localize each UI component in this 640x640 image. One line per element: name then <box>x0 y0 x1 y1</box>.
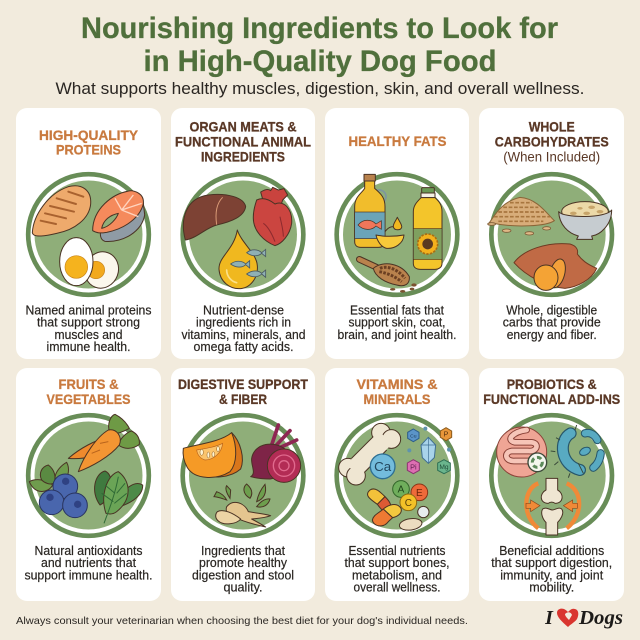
panel: whole carbohydrates <box>479 108 624 359</box>
description: that support digestion, <box>491 556 612 570</box>
description <box>491 544 612 594</box>
description: Natural antioxidants <box>34 544 142 558</box>
heading: whole carbohydrates: WHOLE <box>529 119 575 135</box>
heading: whole carbohydrates: CARBOHYDRATES <box>495 134 609 150</box>
title: Nourishing Ingredients to Look for <box>81 12 558 45</box>
description: Nutrient-dense <box>203 304 284 318</box>
description: mobility. <box>529 580 574 594</box>
heading: digestive support and fiber: DIGESTIVE SUPPORT <box>178 376 308 392</box>
logo: I love Dogs: Dogs <box>578 607 623 629</box>
description: promote healthy <box>199 556 288 570</box>
description: ingredients rich in <box>196 316 291 330</box>
icon: bone, minerals and supplements: E <box>416 488 423 499</box>
description <box>26 304 152 354</box>
heading: vitamins and minerals: VITAMINS & <box>356 376 438 392</box>
description: that support strong <box>37 316 140 330</box>
icon: bone, minerals and supplements: C <box>405 498 412 509</box>
heading: digestive support and fiber <box>178 376 308 407</box>
panel: digestive support and fiber <box>171 368 315 601</box>
description: support immune health. <box>24 568 152 582</box>
description: brain, and joint health. <box>338 328 456 342</box>
heading: organ meats: INGREDIENTS <box>201 148 285 164</box>
panel: fruits and vegetables <box>16 368 161 601</box>
description <box>182 304 306 354</box>
heading: high-quality proteins: HIGH-QUALITY <box>39 127 139 143</box>
description: Ingredients that <box>201 544 286 558</box>
description: digestion and stool <box>192 568 294 582</box>
description: immunity, and joint <box>500 568 604 582</box>
icon: liver, heart and fish oil <box>183 174 303 295</box>
icon: bone, minerals and supplements: A <box>398 485 405 496</box>
heading: whole carbohydrates <box>495 119 609 164</box>
footer note: Always consult your veterinarian when choosing the best diet for your dog's individual needs. <box>16 615 468 627</box>
heading: organ meats: ORGAN MEATS & <box>190 119 296 135</box>
icon: chicken, salmon and eggs <box>28 174 149 295</box>
description: overall wellness. <box>354 580 440 594</box>
icon: bone, minerals and supplements: Cu <box>410 433 417 439</box>
icon: pumpkin, beet and root <box>183 415 303 536</box>
heading: digestive support and fiber: & FIBER <box>219 391 267 407</box>
heading: fruits and vegetables: VEGETABLES <box>46 391 130 407</box>
description: metabolism, and <box>352 568 442 582</box>
description: Beneficial additions <box>499 544 604 558</box>
icon: bone, minerals and supplements: Pi <box>410 462 417 471</box>
description <box>503 304 601 342</box>
logo: I love Dogs: I <box>544 607 554 629</box>
panel: high-quality proteins <box>16 108 161 359</box>
icon: bone, minerals and supplements: P <box>444 430 449 439</box>
description <box>24 544 152 582</box>
description: quality. <box>224 580 262 594</box>
icon: grains, oats and sweet potato <box>488 174 612 295</box>
heading: whole carbohydrates: (When Included) <box>503 148 600 164</box>
title <box>81 12 558 78</box>
description <box>338 304 456 342</box>
description: and nutrients that <box>41 556 137 570</box>
description: that support bones, <box>344 556 450 570</box>
icon: oils and flax seeds <box>337 174 457 295</box>
description: Whole, digestible <box>506 304 597 318</box>
panel: probiotics and functional add-ins <box>479 368 624 601</box>
description: omega fatty acids. <box>194 340 294 354</box>
heading: high-quality proteins: PROTEINS <box>56 142 121 158</box>
heading: fruits and vegetables <box>46 376 130 407</box>
heading: organ meats: FUNCTIONAL ANIMAL <box>175 134 311 150</box>
description: immune health. <box>46 340 130 354</box>
subtitle: What supports healthy muscles, digestion, skin, and overall wellness. <box>56 79 584 98</box>
panel: vitamins and minerals <box>325 368 469 601</box>
description: Named animal proteins <box>26 304 152 318</box>
icon: gut, bacteria and joint <box>491 415 612 536</box>
description: muscles and <box>54 328 123 342</box>
logo: I love Dogs <box>544 607 623 629</box>
heading: probiotics and functional add-ins <box>483 376 620 407</box>
icon: bone, minerals and supplements: Mg <box>439 464 449 471</box>
description: support skin, coat, <box>348 316 446 330</box>
icon: bone, minerals and supplements <box>337 415 457 536</box>
title: in High-Quality Dog Food <box>144 45 496 78</box>
panel: healthy fats <box>325 108 469 359</box>
heading: fruits and vegetables: FRUITS & <box>58 376 118 392</box>
heading: high-quality proteins <box>39 127 139 158</box>
description: carbs that provide <box>503 316 601 330</box>
heading: organ meats <box>175 119 311 164</box>
heading: healthy fats: HEALTHY FATS <box>348 133 446 149</box>
heading: probiotics and functional add-ins: PROBIOTICS & <box>507 376 597 392</box>
heading: vitamins and minerals: MINERALS <box>364 391 430 407</box>
heading: probiotics and functional add-ins: FUNCTIONAL ADD-INS <box>483 391 620 407</box>
icon: carrots, blueberries and spinach <box>28 414 149 536</box>
description: Essential fats that <box>350 304 444 318</box>
description: vitamins, minerals, and <box>182 328 306 342</box>
description <box>192 544 294 594</box>
icon: bone, minerals and supplements: Ca <box>374 459 392 474</box>
description: Essential nutrients <box>348 544 446 558</box>
description: energy and fiber. <box>507 328 597 342</box>
panel: organ meats <box>171 108 315 359</box>
heading: vitamins and minerals <box>356 376 438 407</box>
description <box>344 544 450 594</box>
